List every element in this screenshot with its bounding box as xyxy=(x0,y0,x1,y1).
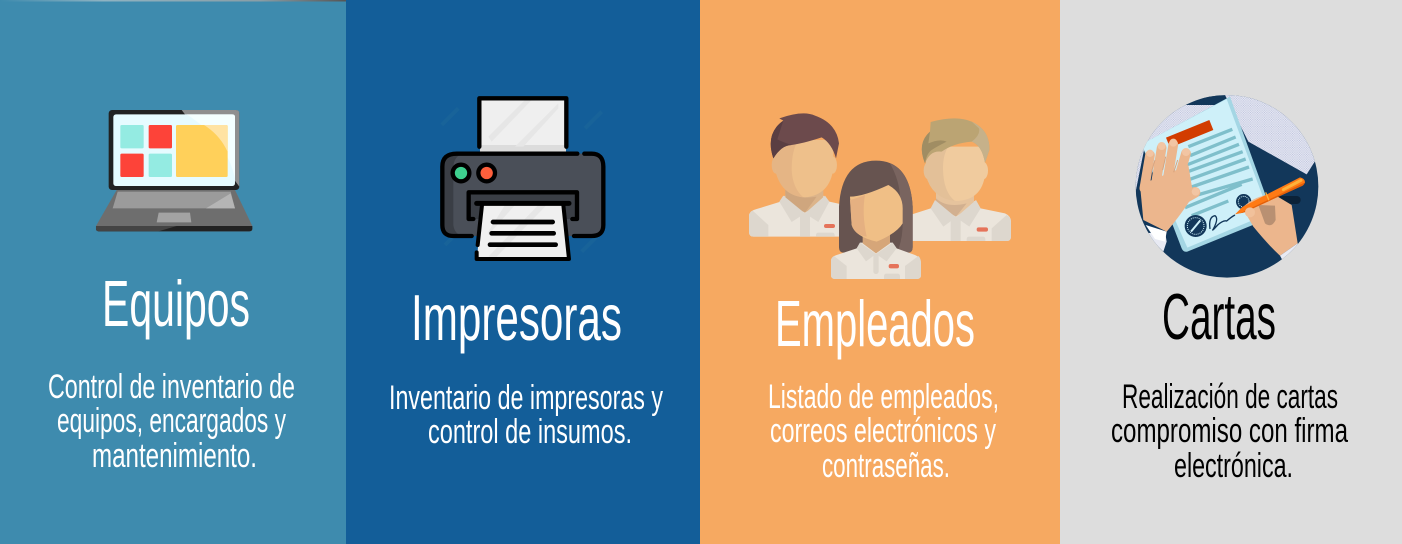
text block: Equipos description: equipos, encargados y xyxy=(57,402,286,440)
text block: Empleados description: Listado de empleados, xyxy=(768,378,999,416)
hand: right with pen xyxy=(1235,177,1305,265)
text block: Equipos description: Control de inventario de xyxy=(48,368,295,406)
text block: Cartas description xyxy=(1111,378,1348,485)
icon: printer xyxy=(442,98,603,259)
panel: Equipos xyxy=(0,0,346,544)
icon: signing a document xyxy=(1135,95,1319,279)
text block: Equipos description xyxy=(48,368,295,475)
icon: employees group xyxy=(749,113,1011,279)
figure: man with dark hair xyxy=(749,113,840,237)
document xyxy=(1142,97,1273,252)
text block: Empleados description: correos electrónicos y xyxy=(770,412,996,450)
icon: laptop xyxy=(96,110,252,231)
text block: Cartas description: electrónica. xyxy=(1174,447,1293,485)
heading: Empleados: Empleados xyxy=(775,287,975,360)
text block: Empleados description: contraseñas. xyxy=(822,447,950,485)
figure: man with blond hair xyxy=(910,118,1011,241)
heading: Cartas: Cartas xyxy=(1162,280,1276,353)
text block: Impresoras description: Inventario de impresoras y xyxy=(389,379,663,417)
heading: Impresoras: Impresoras xyxy=(411,281,622,354)
heading: Equipos: Equipos xyxy=(102,267,250,340)
text block: Impresoras description xyxy=(389,379,663,451)
text block: Empleados description xyxy=(768,378,999,485)
hand: left xyxy=(1140,139,1200,252)
figure: woman xyxy=(831,161,921,279)
text block: Equipos description: mantenimiento. xyxy=(92,437,257,475)
text block: Impresoras description: control de insumos. xyxy=(428,413,632,451)
panel: Cartas xyxy=(1112,95,1348,478)
panel: Empleados xyxy=(700,0,1060,544)
panel: Impresoras xyxy=(346,0,700,544)
